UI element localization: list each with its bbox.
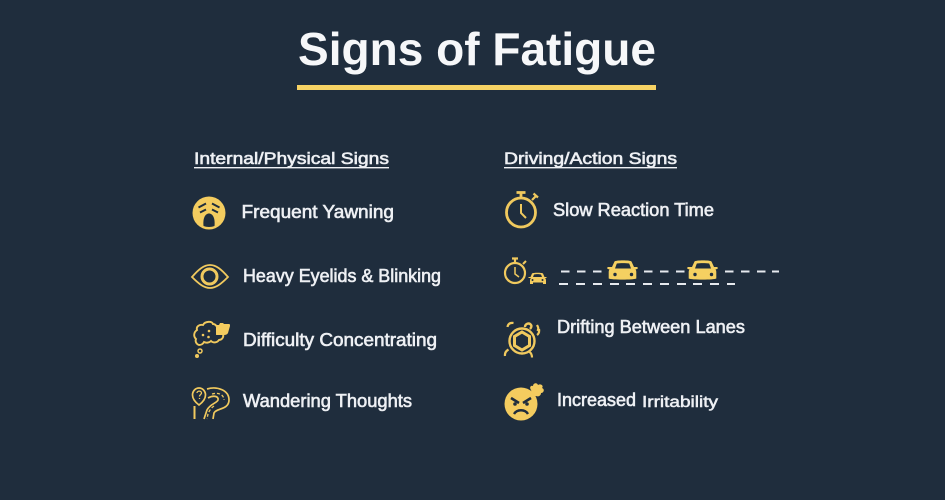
icon: eye — [192, 265, 228, 288]
icon: stopwatch — [506, 192, 538, 227]
icon: angry face with puff — [504, 383, 544, 420]
icon: car 2 — [687, 260, 718, 280]
text: slow reaction time: Slow Reaction Time — [553, 200, 714, 220]
text: drifting between lanes: Drifting Between Lanes — [557, 317, 745, 337]
icon: stopwatch and small car — [505, 258, 546, 284]
icon: yawning face — [192, 196, 226, 230]
icon: winding road with question mark — [192, 388, 229, 419]
icon: car 1 — [607, 260, 638, 280]
heading: driving action signs: Driving/Action Signs — [504, 149, 677, 168]
icon: turtle-like alarm clock — [505, 323, 539, 358]
text: heavy eyelids and blinking: Heavy Eyelids & Blinking — [243, 266, 441, 286]
icon: thought cloud — [194, 322, 230, 358]
text: increased irritability — [557, 390, 718, 411]
text: increased irritability: Irritability — [642, 394, 718, 411]
text: increased irritability: Increased — [557, 390, 636, 410]
text: wandering thoughts: Wandering Thoughts — [243, 391, 412, 411]
text: frequent yawning: Frequent Yawning — [242, 202, 394, 222]
title: Signs of Fatigue — [298, 23, 656, 75]
text: difficulty concentrating: Difficulty Concentrating — [243, 330, 437, 350]
heading: internal physical signs: Internal/Physical Signs — [194, 149, 389, 168]
road dashes with cars — [559, 260, 779, 284]
